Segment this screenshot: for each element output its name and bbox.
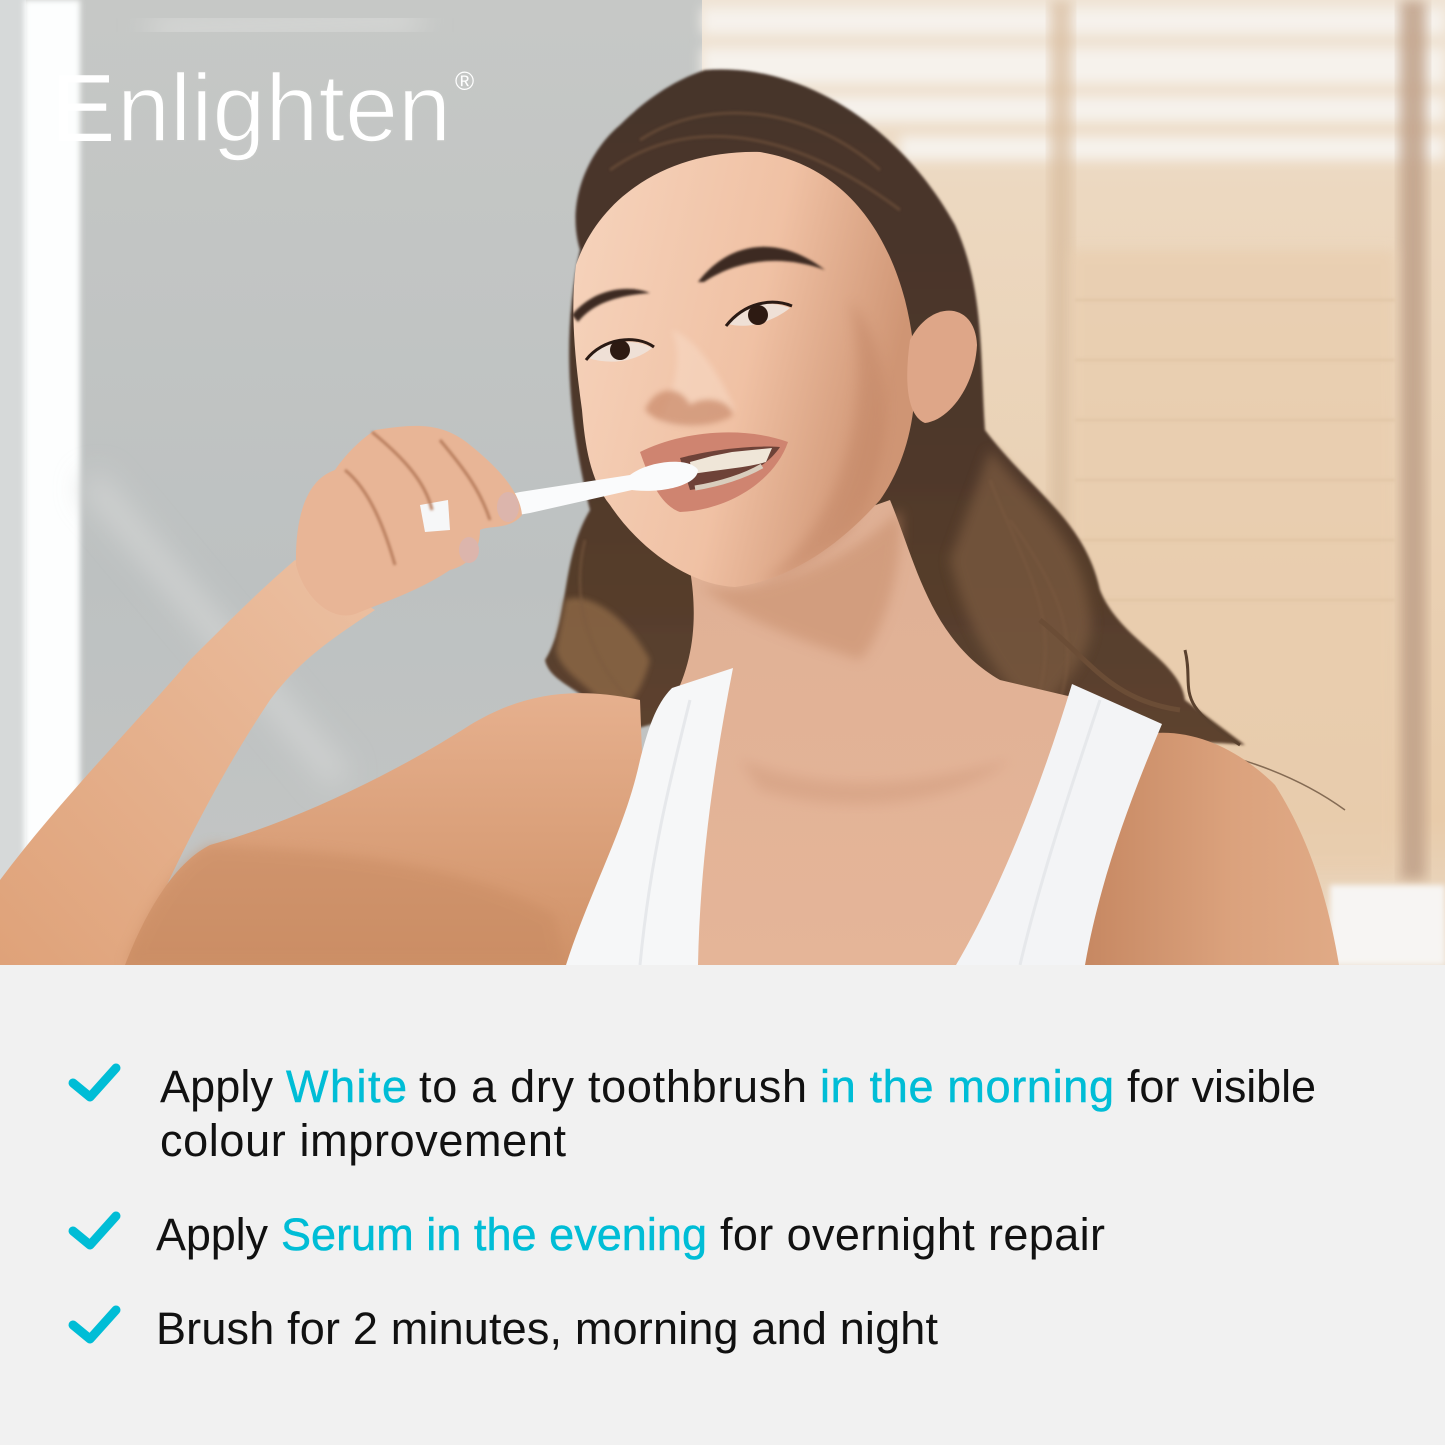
instruction 2: for overnight repair bbox=[720, 1209, 1105, 1260]
toothbrush bbox=[514, 462, 698, 514]
logo: Enlighten: E bbox=[51, 55, 115, 162]
photo background: bathroom wall bbox=[0, 0, 702, 884]
logo: Enlighten: ® bbox=[455, 66, 474, 96]
face bbox=[572, 152, 977, 587]
white tank top bbox=[566, 668, 1162, 965]
icon: check mark 1 bbox=[73, 1068, 116, 1097]
logo: Enlighten: nlighten bbox=[117, 55, 451, 162]
icon: check mark 3 bbox=[73, 1310, 116, 1339]
instruction 1: for visible bbox=[1127, 1061, 1316, 1112]
photo: woman brushing her teeth bbox=[0, 0, 1445, 965]
neck and chest bbox=[680, 500, 1068, 965]
photo background: window blinds bbox=[702, 0, 1445, 965]
hand bbox=[296, 426, 522, 615]
left arm and shoulder bbox=[0, 560, 650, 965]
hair bbox=[545, 69, 1345, 810]
icon: check mark 2 bbox=[73, 1216, 116, 1245]
eyes bbox=[586, 302, 792, 362]
instruction 1 bbox=[160, 1061, 1316, 1166]
panel: brushing instructions bbox=[0, 965, 1445, 1445]
instruction 3: Brush for 2 minutes, morning and night bbox=[156, 1303, 938, 1354]
eyebrows bbox=[572, 247, 825, 322]
lips and teeth bbox=[640, 432, 788, 512]
instruction 1: to a dry toothbrush bbox=[419, 1061, 807, 1112]
instruction 1: in the morning bbox=[820, 1061, 1114, 1112]
instruction 2: Serum in the evening bbox=[281, 1209, 707, 1260]
right shoulder bbox=[1075, 733, 1339, 965]
instruction 2 bbox=[156, 1209, 1105, 1260]
instruction 1: colour improvement bbox=[160, 1115, 566, 1166]
nose bbox=[645, 391, 733, 426]
instruction 2: Apply bbox=[156, 1209, 268, 1260]
instruction 1: White bbox=[286, 1061, 407, 1112]
instruction 1: Apply bbox=[160, 1061, 274, 1112]
